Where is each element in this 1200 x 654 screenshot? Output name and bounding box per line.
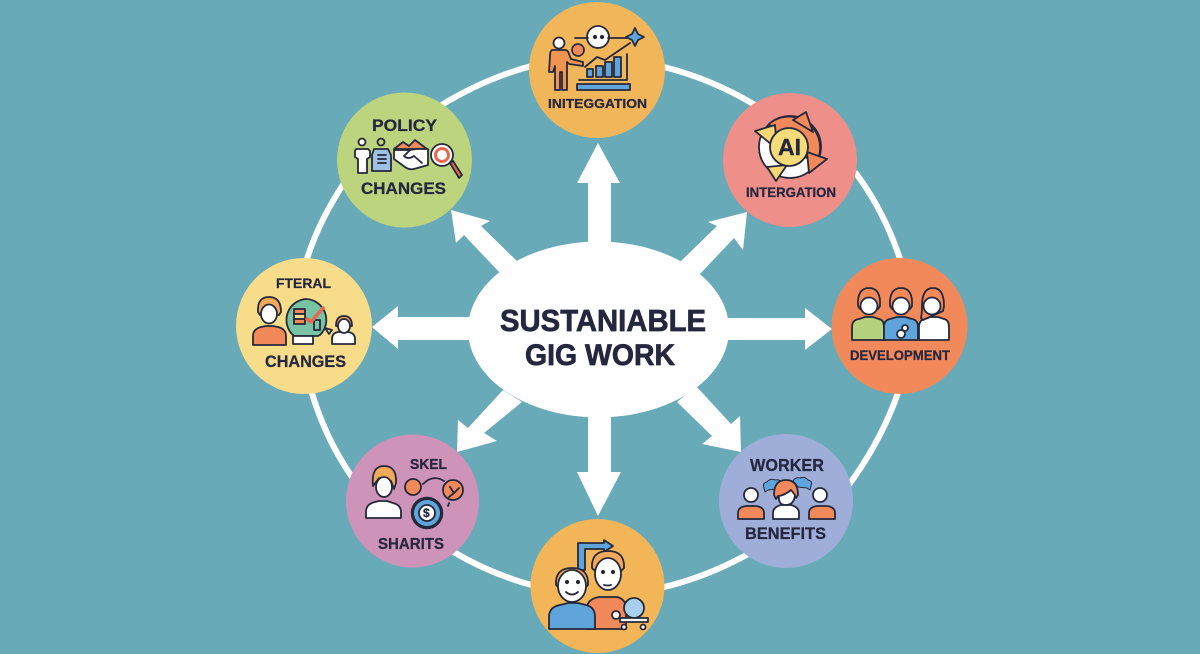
icon: workers with speech clouds xyxy=(738,477,835,519)
icon: presenter with growth chart xyxy=(549,26,644,90)
icon: AI cycle arrows xyxy=(755,112,827,181)
icon text: AI xyxy=(778,134,801,160)
panel: worker benefits xyxy=(719,434,853,568)
arrows radiating from the hub xyxy=(372,143,832,516)
label bottom: CHANGES xyxy=(265,353,346,371)
panel: bottom career pathway xyxy=(530,519,664,653)
panel: AI integration xyxy=(723,93,857,227)
outer ring connecting the topic circles xyxy=(306,65,901,588)
label: INITEGGATION xyxy=(548,96,647,111)
label: INTERGATION xyxy=(746,184,836,200)
label top: FTERAL xyxy=(276,275,331,291)
icon: three people xyxy=(852,288,949,340)
gear symbol: $ xyxy=(423,506,430,520)
icon: two workers with arrow and cart xyxy=(549,540,648,630)
icon: people, handshake, magnifier xyxy=(355,138,462,178)
hub subtitle: GIG WORK xyxy=(525,339,675,372)
label top: WORKER xyxy=(750,455,824,475)
icon: worker, exchange circles and gear xyxy=(366,466,463,528)
label top: POLICY xyxy=(372,117,437,135)
central hub xyxy=(468,242,729,418)
label bottom: BENEFITS xyxy=(745,525,826,543)
label top: SKEL xyxy=(410,457,447,473)
panel: policy changes xyxy=(337,92,472,228)
label bottom: CHANGES xyxy=(361,179,446,198)
icon: person, idea bulb with chart, small person xyxy=(253,297,355,345)
panel: top integration xyxy=(529,2,665,138)
label bottom: SHARITS xyxy=(378,536,444,553)
panel: skill sharing xyxy=(346,434,479,568)
hub title: SUSTANIABLE xyxy=(500,303,706,338)
label: DEVELOPMENT xyxy=(850,348,951,363)
panel: federal changes xyxy=(236,258,372,394)
panel: development xyxy=(832,258,968,394)
